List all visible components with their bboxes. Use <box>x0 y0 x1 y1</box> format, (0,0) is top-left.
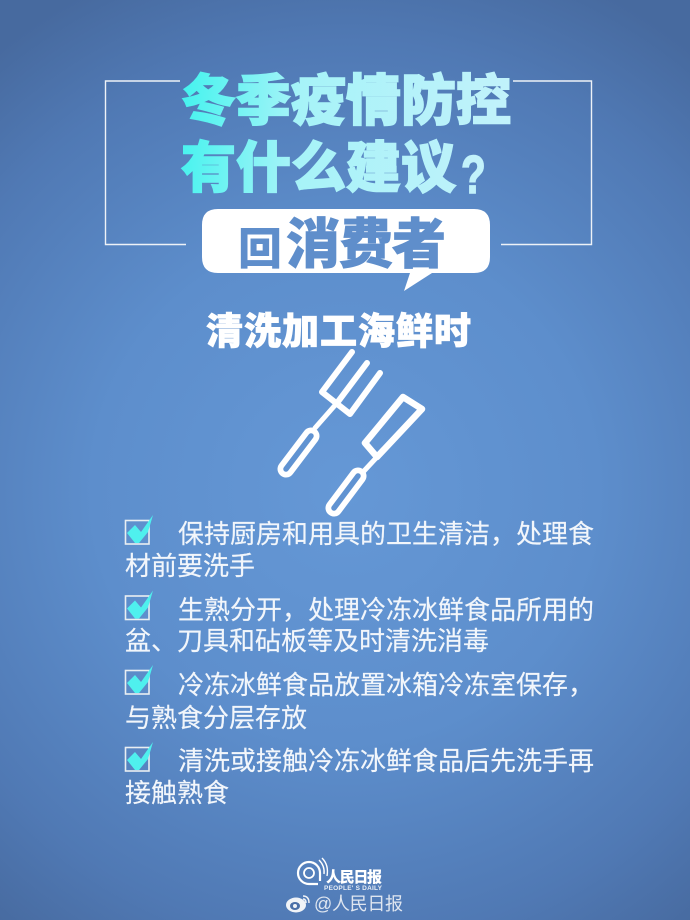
title: 有什么建议 <box>181 137 456 199</box>
tip 1 <box>125 514 594 583</box>
tip 3 <box>125 665 594 735</box>
icon: fork <box>286 352 380 469</box>
logo: People's Daily <box>298 858 383 892</box>
tip 2: 盆、刀具和砧板等及时清洗消毒 <box>125 621 489 658</box>
tip 3: 冷冻冰鲜食品放置冰箱冷冻室保存， <box>178 665 594 702</box>
watermark: Weibo: @人民日报 <box>314 894 403 914</box>
logo: People's Daily: 人民日报 <box>326 869 382 886</box>
icon: knife <box>334 397 422 508</box>
icon: fork and knife <box>286 352 422 508</box>
icon: checkbox <box>126 742 153 771</box>
icon: weibo <box>286 896 309 912</box>
title <box>181 70 511 205</box>
icon: checkbox <box>126 665 153 694</box>
tip 1: 材前要洗手 <box>125 546 255 583</box>
speech bubble: @消费者: 回 <box>238 225 282 274</box>
title frame <box>106 81 592 244</box>
title: 冬季疫情防控 <box>181 70 511 132</box>
speech bubble: @消费者 <box>202 209 490 291</box>
tip 2 <box>125 590 594 658</box>
tip 4: 接触熟食 <box>125 773 229 810</box>
title: ? <box>461 145 486 205</box>
icon: checkbox <box>126 590 153 620</box>
tip 2: 生熟分开，处理冷冻冰鲜食品所用的 <box>178 590 594 627</box>
icon: at sign with signal <box>298 858 327 884</box>
tip 1: 保持厨房和用具的卫生清洁，处理食 <box>178 514 594 551</box>
speech bubble: @消费者: 消费者 <box>286 215 446 275</box>
logo: People's Daily: PEOPLE' S DAILY <box>324 885 383 892</box>
icon: checkbox <box>126 515 153 544</box>
tip 4: 清洗或接触冷冻冰鲜食品后先洗手再 <box>178 741 594 778</box>
tip 3: 与熟食分层存放 <box>125 698 307 735</box>
subtitle: 清洗加工海鲜时 <box>206 311 471 352</box>
tip 4 <box>125 741 594 810</box>
